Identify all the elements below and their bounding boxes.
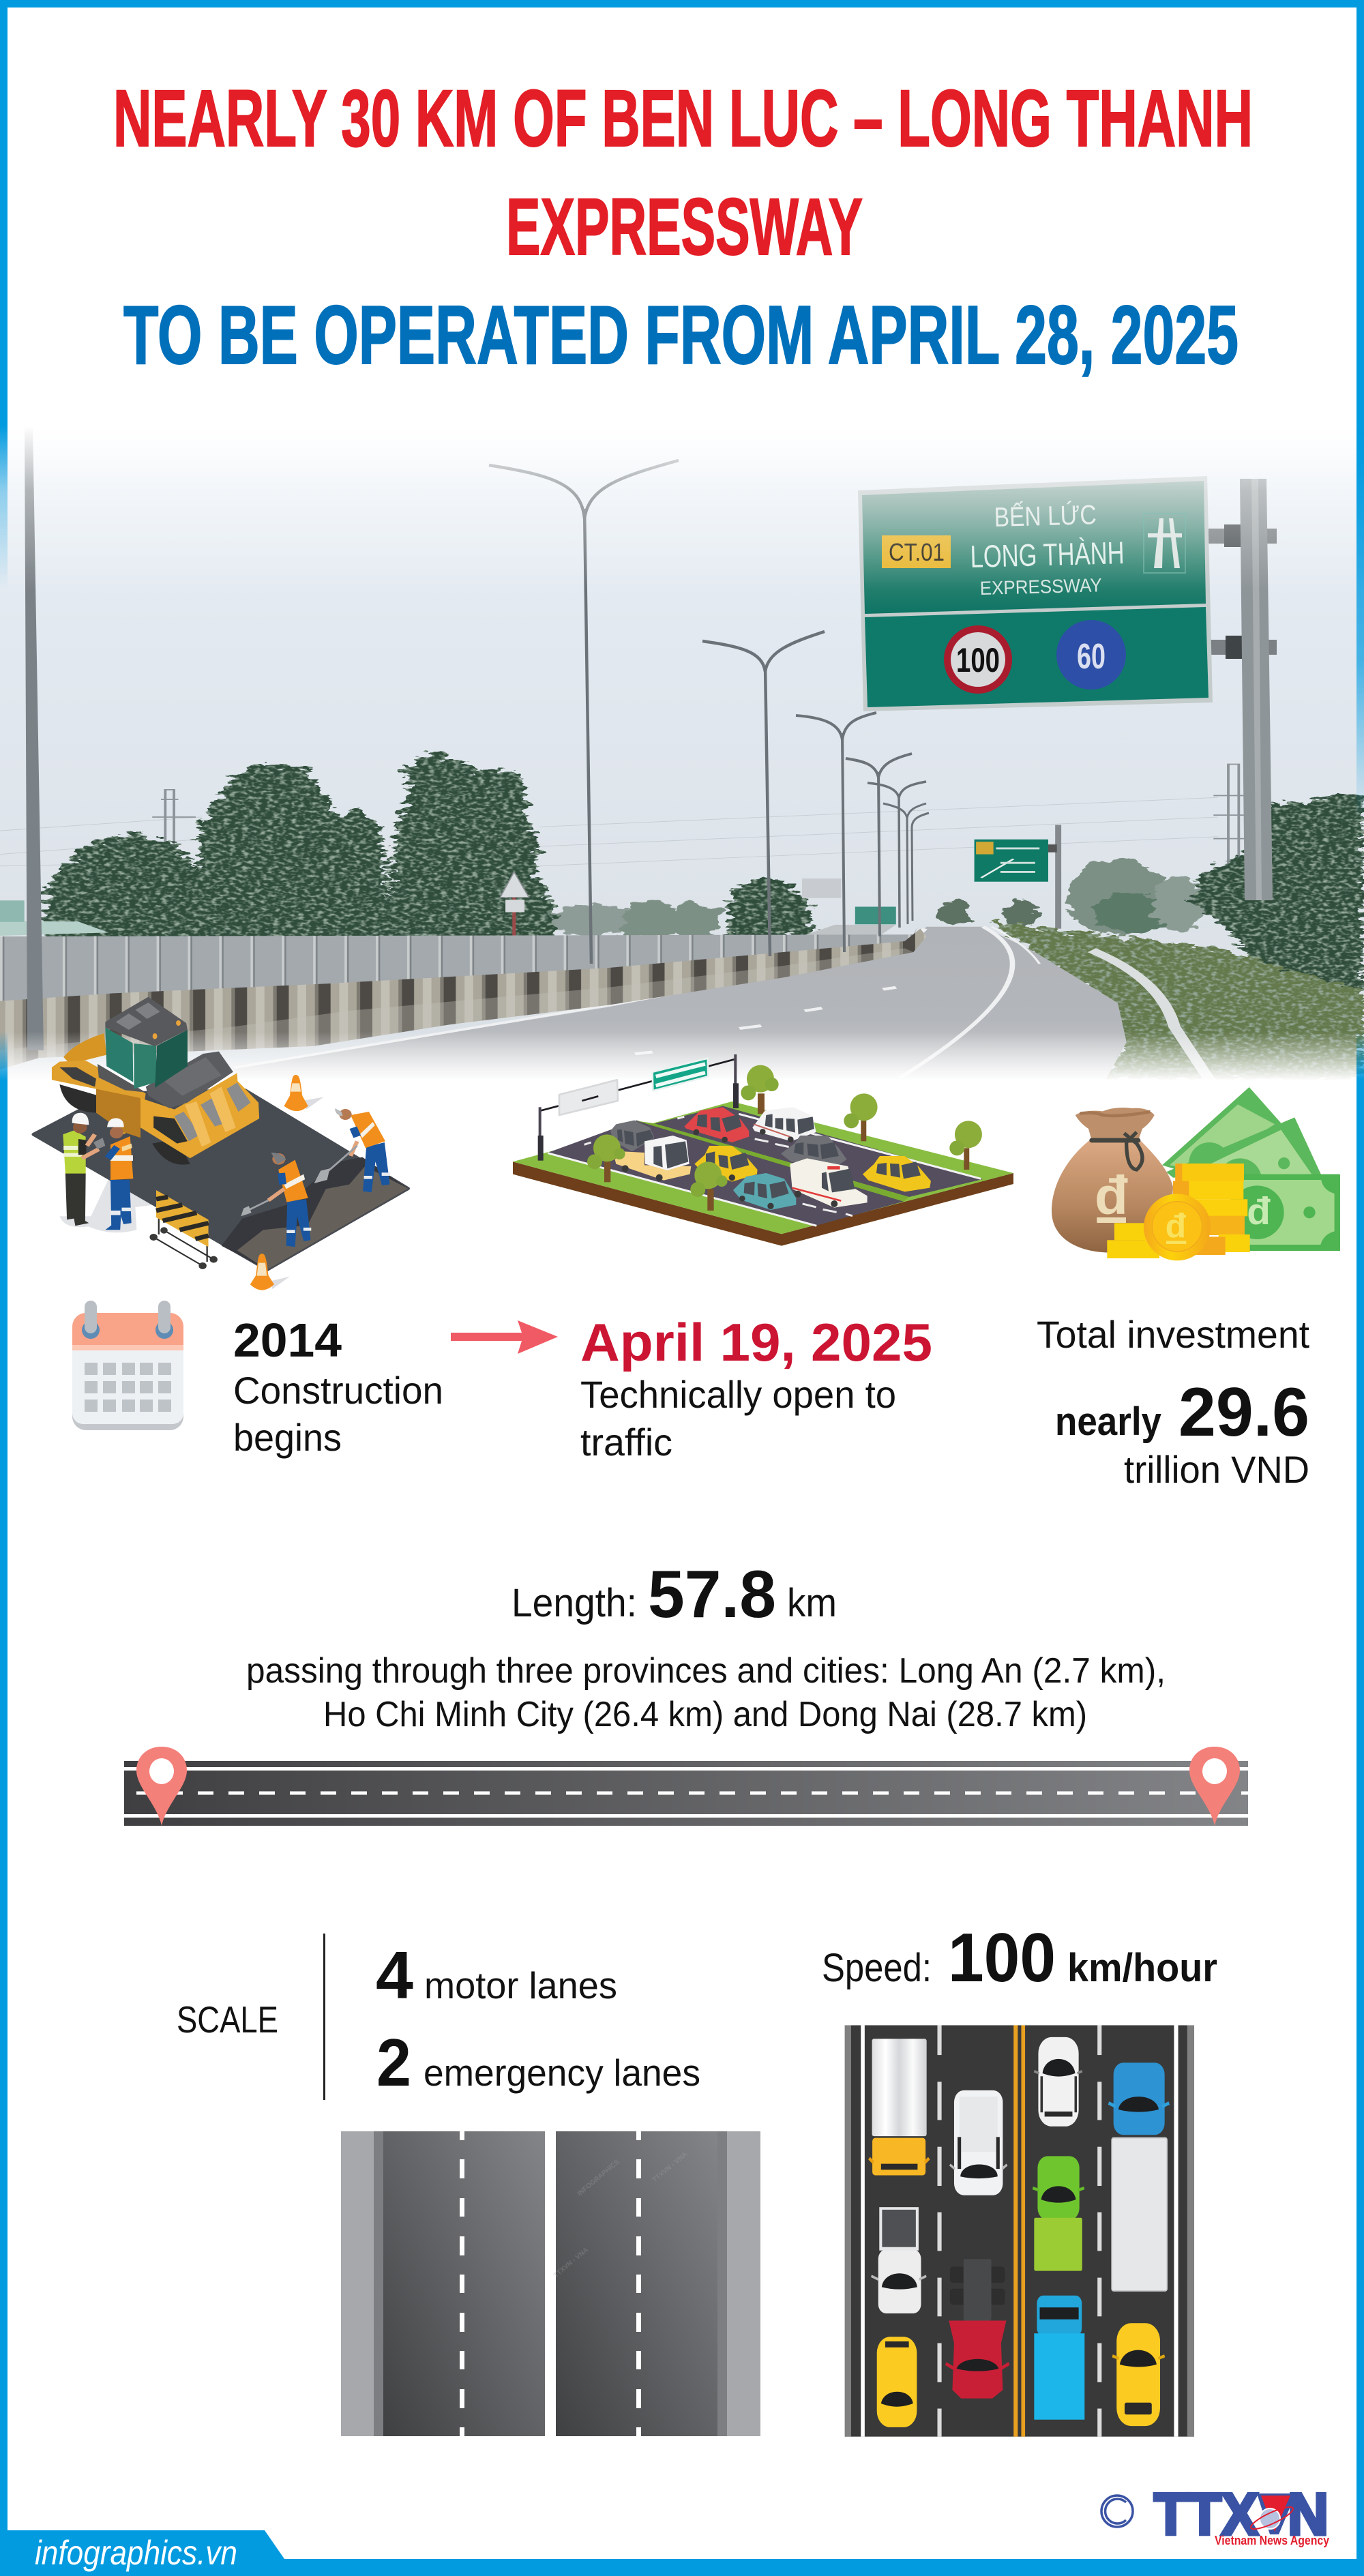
guardrail	[1092, 950, 1209, 1080]
illustration: isometric expressway	[513, 1054, 1013, 1246]
banknote 2	[1166, 1117, 1321, 1202]
sign route badge CT.01: CT.01	[889, 538, 945, 566]
asphalt patch	[33, 1090, 408, 1270]
worker with orange vest and tablet	[105, 1118, 133, 1230]
text: speed: 100	[948, 1920, 1056, 1996]
roller	[52, 997, 259, 1165]
text: construction begins 2014: Construction	[233, 1369, 443, 1412]
text: scale label: SCALE	[177, 1998, 278, 2041]
white pickup	[872, 2207, 926, 2313]
lanes road graphic: TTXVN - VNA	[552, 2247, 590, 2279]
text: total investment	[1037, 1313, 1309, 1491]
copyright symbol	[1101, 2496, 1133, 2527]
photo detail layer	[0, 752, 1364, 1081]
expressway direction sign	[858, 476, 1213, 711]
white van	[950, 2090, 1007, 2195]
text: emergency lanes: emergency lanes	[424, 2052, 700, 2094]
text: length: km	[787, 1581, 837, 1625]
logo TTXVN	[1154, 2482, 1329, 2547]
text: technically open April 19, 2025	[580, 1312, 932, 1464]
roller cab	[98, 1064, 146, 1093]
yellow car left	[877, 2337, 917, 2427]
speed limit 100 sign: 100	[956, 641, 1000, 679]
yellow car	[694, 1146, 758, 1182]
banknote 3	[1230, 1174, 1340, 1251]
hazy background trees	[548, 860, 1205, 941]
lanes road graphic: INFOGRAPHICS	[576, 2158, 621, 2197]
lanes road graphic: TTXVN - VNA	[651, 2151, 689, 2184]
grey car 2	[781, 1136, 847, 1166]
cyan truck	[1034, 2296, 1084, 2420]
concrete barrier	[0, 929, 926, 1069]
dark foreground trees	[45, 752, 1364, 995]
text: motor lanes: 4	[376, 1938, 413, 2013]
street lights	[489, 460, 929, 964]
fence	[0, 927, 918, 1001]
text: emergency lanes: 2	[376, 2025, 411, 2100]
text: length: Length:	[512, 1581, 637, 1625]
title: EXPRESSWAY	[506, 182, 863, 272]
money bag: đ	[1095, 1165, 1128, 1226]
lanes road graphic	[341, 2131, 760, 2436]
text: provinces passed: passing through three provinces and cities: Long An (2.7 km),	[246, 1651, 1166, 1691]
road strip graphic	[124, 1761, 1248, 1826]
text: technically open April 19, 2025: traffic	[580, 1421, 672, 1464]
speed limit 100 sign	[944, 625, 1012, 694]
base	[513, 1161, 1013, 1246]
gantry and signs	[538, 1054, 739, 1161]
minimum speed 60 sign	[1056, 620, 1126, 690]
title	[113, 74, 1253, 381]
sign post	[1240, 479, 1273, 900]
text: length: 57.8	[648, 1556, 776, 1631]
power lines	[0, 797, 1218, 866]
striped road barrier	[149, 1190, 218, 1269]
text: length	[512, 1556, 837, 1631]
far overpass and distant signs	[802, 878, 841, 898]
traffic road top view	[845, 2025, 1194, 2437]
red car	[684, 1107, 749, 1142]
banknote 3: đ	[1247, 1190, 1271, 1233]
text: total investment: Total investment	[1037, 1313, 1309, 1356]
text: total investment: nearly	[1055, 1400, 1161, 1444]
white van	[752, 1107, 816, 1142]
worker with lime vest	[63, 1113, 105, 1226]
minimum speed 60 sign: 60	[1077, 637, 1106, 677]
hut at left	[0, 921, 108, 936]
sign text: destinations: BẾN LỨC	[994, 499, 1097, 533]
trees near	[587, 1134, 625, 1182]
grey car	[610, 1121, 654, 1151]
text: provinces passed	[246, 1651, 1166, 1734]
white car	[1034, 2037, 1082, 2127]
ambulance	[790, 1158, 868, 1208]
icon: end pin	[1189, 1747, 1240, 1826]
road surface	[235, 927, 1127, 1081]
road markings	[235, 927, 1039, 1078]
blue cab truck with white cargo	[1109, 2062, 1169, 2291]
text: provinces passed: Ho Chi Minh City (26.4 km) and Dong Nai (28.7 km)	[323, 1695, 1087, 1734]
left light pole	[25, 426, 44, 1050]
worker shovelling centre	[241, 1153, 311, 1247]
text: technically open April 19, 2025: April 19, 2025	[580, 1312, 932, 1372]
text: speed	[822, 1920, 1217, 1996]
money bag	[1052, 1108, 1173, 1253]
illustration: money bag, coins and banknotes	[1052, 1087, 1340, 1260]
logo TTXVN: TTX	[1154, 2482, 1258, 2547]
divider line	[323, 1934, 325, 2100]
icon: start pin	[136, 1747, 187, 1826]
expressway direction sign: EXPRESSWAY	[979, 574, 1102, 599]
flatbed pickup	[615, 1136, 691, 1181]
small green direction sign	[975, 825, 1061, 929]
lanes	[548, 1121, 904, 1226]
red tractor truck	[946, 2259, 1009, 2399]
text: speed: Speed:	[822, 1946, 932, 1990]
banknote 1	[1162, 1087, 1281, 1183]
text: motor lanes: motor lanes	[424, 1964, 617, 2007]
yellow car 3	[863, 1156, 931, 1191]
right frame edge over photo	[1356, 426, 1364, 818]
text: emergency lanes	[376, 2025, 700, 2100]
photo: expressway with road sign	[0, 423, 1364, 1105]
text: total investment: trillion VND	[1124, 1448, 1309, 1491]
right grass verge	[992, 921, 1364, 1080]
logo TTXVN: Vietnam News Agency	[1215, 2534, 1329, 2547]
yellow car right	[1112, 2323, 1165, 2426]
icon: calendar	[72, 1301, 183, 1430]
green truck	[1033, 2156, 1084, 2271]
text: construction begins 2014: begins	[233, 1416, 342, 1459]
expressway direction sign: LONG THÀNH	[970, 535, 1125, 574]
worker shadows	[59, 1178, 153, 1232]
sign motorway icon	[1144, 514, 1185, 573]
triangle road sign	[500, 872, 529, 938]
yellow-cab box truck	[869, 2039, 929, 2175]
text: technically open April 19, 2025: Technically open to	[580, 1373, 896, 1416]
text: speed: km/hour	[1067, 1946, 1217, 1990]
footer site name: infographics.vn	[35, 2534, 237, 2572]
tree far	[741, 1065, 779, 1114]
text: motor lanes	[376, 1938, 617, 2013]
text: total investment: 29.6	[1178, 1374, 1309, 1451]
gold coins: đ	[1166, 1206, 1187, 1245]
logo TTXVN: N	[1288, 2482, 1329, 2547]
pylons	[152, 765, 1244, 870]
cones	[284, 1075, 324, 1111]
gold coins	[1107, 1164, 1250, 1260]
arrow	[451, 1320, 558, 1354]
teal car	[733, 1173, 796, 1210]
illustration: road roller and workers	[33, 997, 408, 1290]
text: construction begins 2014: 2014	[233, 1314, 342, 1367]
text: construction begins 2014	[233, 1314, 443, 1459]
sign brackets	[1209, 524, 1277, 659]
worker shovelling right	[314, 1108, 390, 1192]
